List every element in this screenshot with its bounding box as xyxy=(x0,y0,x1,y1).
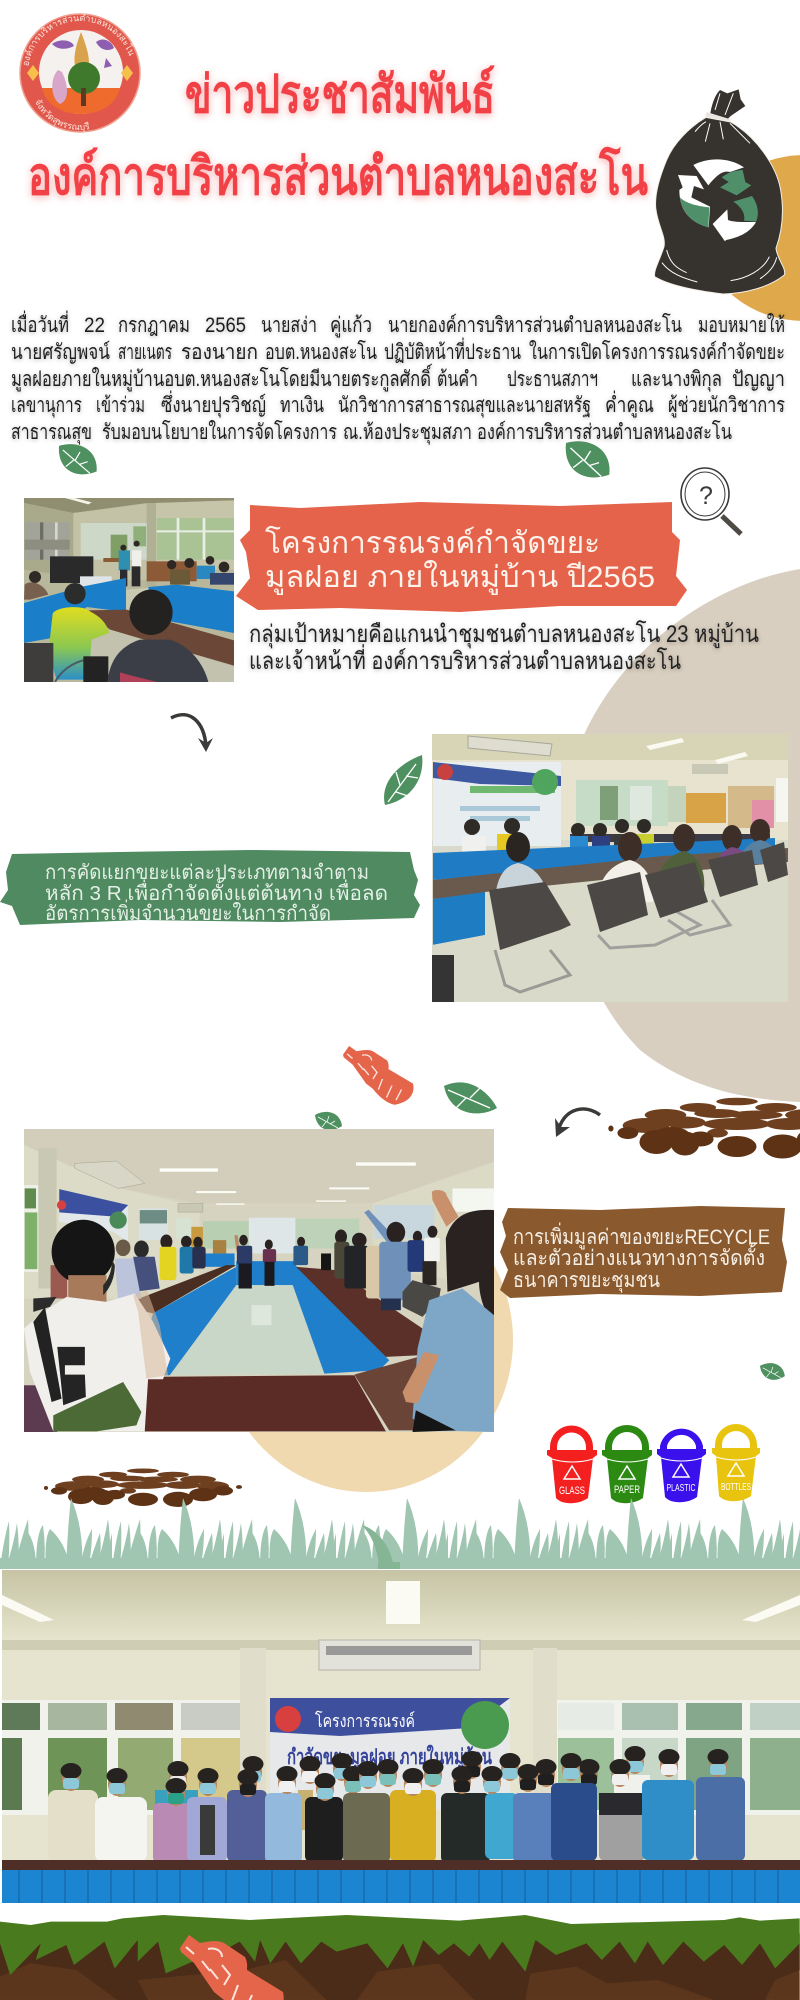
icon: bucket plastic xyxy=(657,1429,706,1502)
body paragraph: และนางพิกุล xyxy=(631,368,722,392)
banner: orange campaign title: โครงการรณรงค์กำจัดขยะ xyxy=(265,525,600,560)
icon: bucket plastic: PLASTIC xyxy=(666,1483,696,1494)
banner: orange campaign title xyxy=(236,502,687,612)
body paragraph: ประธานสภาฯ xyxy=(507,368,598,391)
body paragraph: รับมอบนโยบายในการจัดโครงการ xyxy=(102,420,337,444)
photo: group portrait: กำจัดขยะมูลฝอย ภายในหมู่บ้าน xyxy=(287,1744,492,1771)
body paragraph: สายเนตร xyxy=(118,341,172,364)
icon: magnifier with question mark xyxy=(681,468,741,534)
icon: magnifier with question mark: ? xyxy=(699,482,713,510)
banner: brown recycle: ธนาคารขยะชุมชน xyxy=(513,1269,660,1293)
body paragraph: ณ.ห้องประชุมสภา xyxy=(343,421,472,445)
icon: leaf small xyxy=(315,1112,342,1130)
body paragraph: คู่แก้ว xyxy=(330,314,372,338)
footer: ground with grass xyxy=(0,1915,800,2000)
banner: brown recycle: และตัวอย่างแนวทางการจัดตั้ง xyxy=(513,1243,765,1270)
body paragraph: เลขานุการ xyxy=(11,394,82,418)
icon: leaf large xyxy=(444,1082,497,1113)
body paragraph: ปฏิบัติหน้าที่ประธาน xyxy=(384,337,521,364)
title: ข่าวประชาสัมพันธ์ xyxy=(185,65,495,124)
body paragraph: ทาเงิน xyxy=(280,394,324,417)
icon: bucket paper xyxy=(602,1425,652,1503)
icon: bucket bottles xyxy=(712,1424,760,1501)
banner: orange campaign title: มูลฝอย ภายในหมู่บ้าน ปี2565 xyxy=(265,560,655,595)
body paragraph: นักวิชาการสาธารณสุขและนายสหรัฐ xyxy=(338,394,591,418)
photo: seated audience xyxy=(432,734,788,1002)
body paragraph xyxy=(11,310,785,445)
background circle: beige xyxy=(563,569,800,1102)
icon: leaf vertical xyxy=(384,755,422,805)
body paragraph: นายสง่า xyxy=(261,314,317,337)
photo: group portrait xyxy=(2,1570,800,1903)
body paragraph: อบต.หนองสะโน xyxy=(265,340,377,364)
icon: leaf left xyxy=(54,441,101,478)
icon: bucket glass xyxy=(547,1425,597,1503)
body paragraph: สาธารณสุข xyxy=(11,421,92,445)
background circle: mustard xyxy=(705,155,800,321)
banner: brown recycle xyxy=(500,1206,787,1298)
grass strip xyxy=(0,1493,800,1569)
icon: bucket bottles: BOTTLES xyxy=(721,1482,751,1493)
banner: green 3R xyxy=(0,850,420,925)
icon: leaf right xyxy=(559,437,616,482)
body paragraph: ซึ่งนายปุรวิชญ์ xyxy=(161,390,266,418)
body paragraph: กรกฎาคม xyxy=(118,314,190,337)
icon: dirt pile right xyxy=(608,1098,800,1158)
background circle: peach xyxy=(219,1188,513,1492)
title xyxy=(28,65,648,206)
body paragraph: เมื่อวันที่ xyxy=(11,310,69,337)
body paragraph: รองนายก xyxy=(181,341,258,364)
body paragraph: เข้าร่วม xyxy=(96,394,145,417)
icon: bottle in ground xyxy=(180,1935,284,2000)
logo: จังหวัดสุพรรณบุรี xyxy=(36,100,89,132)
logo: องค์การบริหารส่วนตำบลหนองสะโน xyxy=(24,14,134,66)
icon: bucket glass: GLASS xyxy=(559,1485,585,1497)
body paragraph: 22 xyxy=(84,314,105,337)
icon: dirt pile left xyxy=(44,1468,242,1507)
icon: garbage bag with recycle symbol xyxy=(654,89,785,294)
banner: green 3R: อัตรการเพิ่มจำนวนขยะในการกำจัด xyxy=(45,899,331,925)
photo: meeting side view xyxy=(24,498,234,682)
banner: green 3R: การคัดแยกขยะแต่ละประเภทตามจำตาม xyxy=(45,862,369,884)
text: target group: และเจ้าหน้าที่ องค์การบริหารส่วนตำบลหนองสะโน xyxy=(249,644,681,675)
icon: bucket paper: PAPER xyxy=(614,1484,640,1496)
banner: green 3R: หลัก 3 R เพื่อกำจัดตั้งแต่ต้นทาง เพื่อลด xyxy=(45,879,388,905)
icon: leaf far right xyxy=(760,1363,785,1380)
text: target group xyxy=(249,620,759,675)
logo xyxy=(19,13,141,133)
body paragraph: 2565 xyxy=(205,314,246,337)
body paragraph: มูลฝอยภายในหมู่บ้านอบต.หนองสะโนโดยมีนายตระกูลศักดิ์ xyxy=(11,363,433,392)
icon: orange bottle xyxy=(343,1046,414,1105)
body paragraph: ปัญญา xyxy=(732,368,785,391)
body paragraph: ต้นคำ xyxy=(437,368,478,391)
photo: group raising hands xyxy=(24,1129,494,1432)
body paragraph: นายศรัญพจน์ xyxy=(11,340,110,364)
body paragraph: ค่ำคูณ xyxy=(605,390,654,418)
arrow: curved left xyxy=(555,1109,600,1137)
body paragraph: องค์การบริหารส่วนตำบลหนองสะโน xyxy=(477,420,732,444)
arrow: curved down xyxy=(171,715,213,752)
photo: group portrait: โครงการรณรงค์ xyxy=(315,1710,415,1731)
body paragraph: นายกองค์การบริหารส่วนตำบลหนองสะโน xyxy=(388,313,682,337)
